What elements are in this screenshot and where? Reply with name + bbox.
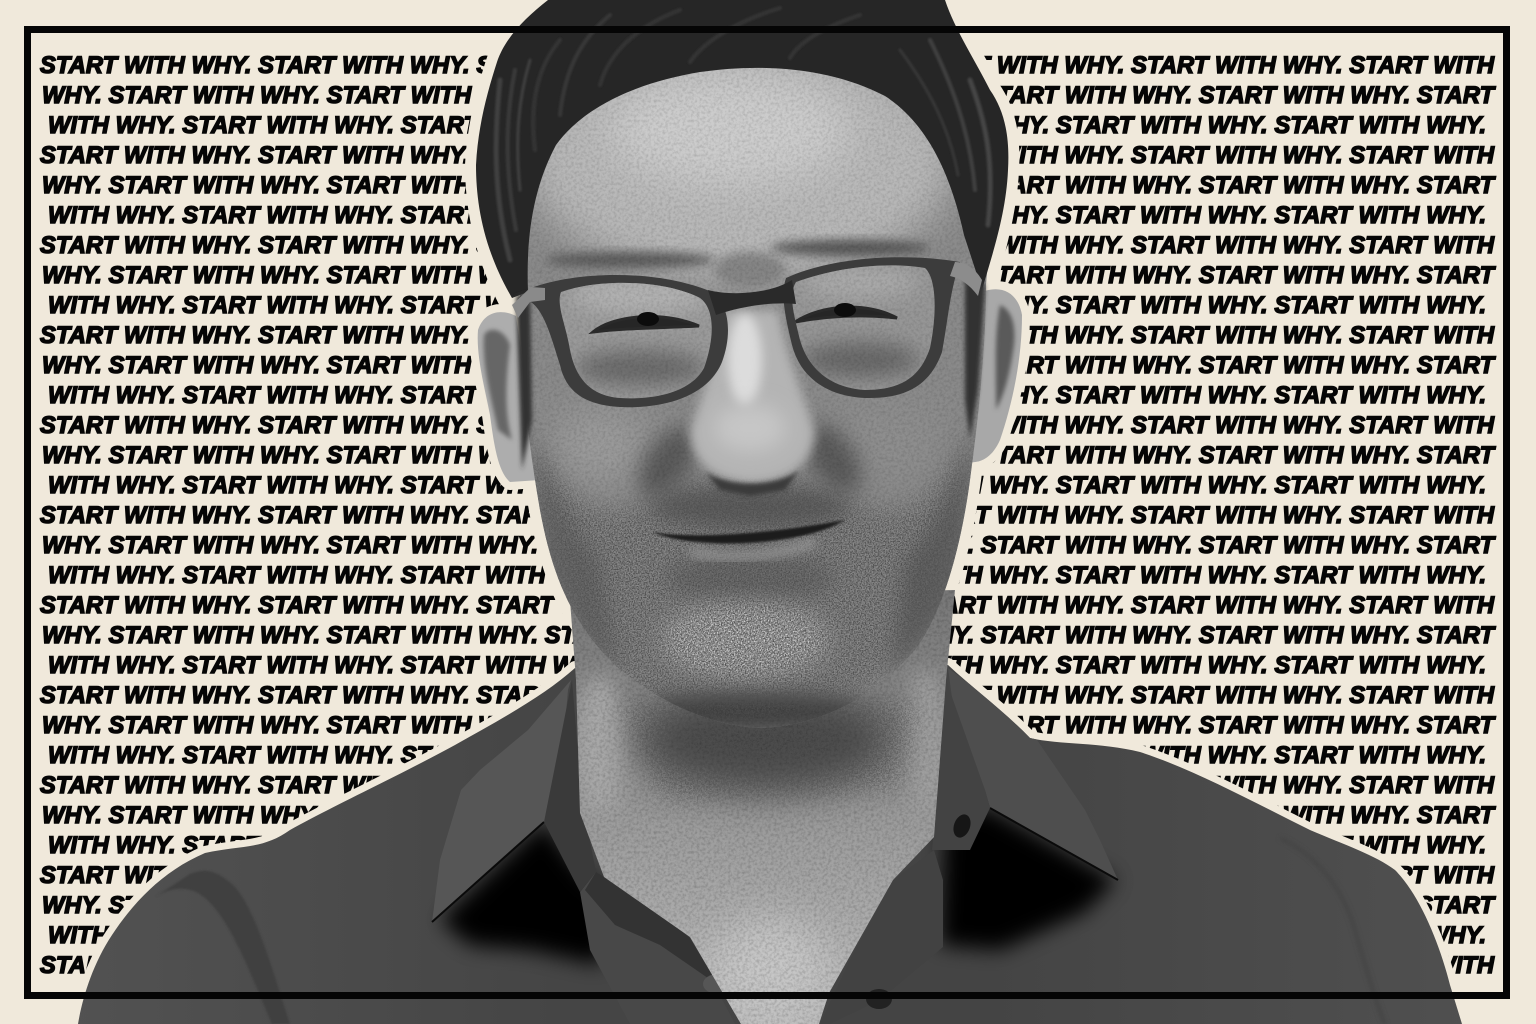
left collar bbox=[432, 680, 571, 922]
glasses bbox=[512, 250, 982, 410]
hair bbox=[476, 0, 1008, 298]
repeating text pattern: start with why: WHY. START WITH WHY. START WITH WHY. START WITH WHY. START WITH WHY. START WITH WHY. START WITH WHY. START bbox=[42, 443, 1497, 469]
repeating text pattern: start with why: WITH WHY. START WITH WHY. START WITH WHY. START WITH WHY. START WITH WHY. START WITH WHY. START WITH WHY. bbox=[48, 473, 1486, 499]
face bbox=[520, 68, 988, 728]
repeating text pattern: start with why: WHY. START WITH WHY. START WITH WHY. START WITH WHY. START WITH WHY. START WITH WHY. START WITH WHY. START bbox=[42, 623, 1497, 649]
sideburn right bbox=[965, 270, 985, 440]
hair strands bbox=[496, 8, 990, 260]
nose side shadows bbox=[630, 420, 700, 502]
repeating text pattern: start with why: WITH WHY. START WITH WHY. START WITH WHY. START WITH WHY. START WITH WHY. START WITH WHY. START WITH WHY. bbox=[48, 923, 1486, 949]
mouth bbox=[652, 520, 845, 544]
central brow crease bbox=[714, 252, 786, 288]
beard sides bbox=[531, 448, 622, 668]
nostril shadow bbox=[705, 470, 800, 496]
black shadow under left collar bbox=[440, 822, 620, 965]
skin grain bbox=[528, 68, 986, 724]
chin grey speckle bbox=[660, 602, 830, 678]
left eye bbox=[593, 317, 699, 332]
right lens bbox=[792, 265, 935, 390]
sleeve seam right bbox=[1280, 838, 1385, 1024]
right collar stand bbox=[933, 698, 990, 850]
neck stubble bbox=[620, 700, 920, 800]
left ear bbox=[478, 312, 540, 482]
shirt button lower right bbox=[866, 989, 892, 1009]
repeating text pattern: start with why: WHY. START WITH WHY. START WITH WHY. START WITH WHY. START WITH WHY. START WITH WHY. START WITH WHY. START bbox=[42, 803, 1497, 829]
temple left bbox=[512, 287, 545, 318]
right eye bbox=[795, 307, 897, 322]
repeating text pattern: start with why: START WITH WHY. START WITH WHY. START WITH WHY. START WITH WHY. START WITH WHY. START WITH WHY. START WITH bbox=[40, 323, 1495, 349]
repeating text pattern: start with why: START WITH WHY. START WITH WHY. START WITH WHY. START WITH WHY. START WITH WHY. START WITH WHY. START WITH bbox=[40, 53, 1495, 79]
black shadow under right collar bbox=[940, 806, 1116, 950]
temple right bbox=[950, 262, 982, 296]
repeating text pattern: start with why: START WITH WHY. START WITH WHY. START WITH WHY. START WITH WHY. START WITH WHY. START WITH WHY. START WITH bbox=[40, 503, 1495, 529]
right placket bbox=[931, 850, 943, 950]
repeating text pattern: start with why: WITH WHY. START WITH WHY. START WITH WHY. START WITH WHY. START WITH WHY. START WITH WHY. START WITH WHY. bbox=[48, 203, 1486, 229]
left collar stand bbox=[544, 680, 596, 892]
repeating text pattern: start with why: WHY. START WITH WHY. START WITH WHY. START WITH WHY. START WITH WHY. START WITH WHY. START WITH WHY. START bbox=[42, 533, 1497, 559]
left iris bbox=[637, 312, 659, 326]
sleeve seam left bbox=[155, 871, 290, 1024]
brow shadow bbox=[545, 252, 715, 268]
left frame outer bbox=[531, 275, 728, 407]
repeating text pattern: start with why: START WITH WHY. START WITH WHY. START WITH WHY. START WITH WHY. START WITH WHY. START WITH WHY. START WITH bbox=[40, 863, 1495, 889]
repeating text pattern: start with why: START WITH WHY. START WITH WHY. START WITH WHY. START WITH WHY. START WITH WHY. START WITH WHY. START WITH bbox=[40, 683, 1495, 709]
left lens bbox=[560, 282, 712, 398]
sideburn left bbox=[516, 292, 532, 470]
repeating text pattern: start with why: WITH WHY. START WITH WHY. START WITH WHY. START WITH WHY. START WITH WHY. START WITH WHY. START WITH WHY. bbox=[48, 743, 1486, 769]
right ear bbox=[965, 289, 1022, 462]
repeating text pattern: start with why: WITH WHY. START WITH WHY. START WITH WHY. START WITH WHY. START WITH WHY. START WITH WHY. START WITH WHY. bbox=[48, 293, 1486, 319]
repeating text pattern: start with why: START WITH WHY. START WITH WHY. START WITH WHY. START WITH WHY. START WITH WHY. START WITH WHY. START WITH bbox=[40, 233, 1495, 259]
right frame outer bbox=[784, 257, 960, 398]
right iris bbox=[834, 303, 856, 317]
bridge bbox=[708, 280, 796, 315]
repeating text pattern: start with why: WHY. START WITH WHY. START WITH WHY. START WITH WHY. START WITH WHY. START WITH WHY. START WITH WHY. START bbox=[42, 893, 1497, 919]
repeating text pattern: start with why: WHY. START WITH WHY. START WITH WHY. START WITH WHY. START WITH WHY. START WITH WHY. START WITH WHY. START bbox=[42, 353, 1497, 379]
beard texture bbox=[530, 420, 972, 720]
nose bbox=[690, 310, 815, 484]
repeating text pattern: start with why: WITH WHY. START WITH WHY. START WITH WHY. START WITH WHY. START WITH WHY. START WITH WHY. START WITH WHY. bbox=[48, 653, 1486, 679]
repeating text pattern: start with why: WITH WHY. START WITH WHY. START WITH WHY. START WITH WHY. START WITH WHY. START WITH WHY. START WITH WHY. bbox=[48, 833, 1486, 859]
lower lip bbox=[690, 542, 815, 556]
left placket bbox=[580, 874, 626, 974]
repeating text pattern: start with why: WHY. START WITH WHY. START WITH WHY. START WITH WHY. START WITH WHY. START WITH WHY. START WITH WHY. START bbox=[42, 83, 1497, 109]
repeating text pattern: start with why: WHY. START WITH WHY. START WITH WHY. START WITH WHY. START WITH WHY. START WITH WHY. START WITH WHY. START bbox=[42, 263, 1497, 289]
repeating text pattern: start with why: WITH WHY. START WITH WHY. START WITH WHY. START WITH WHY. START WITH WHY. START WITH WHY. START WITH WHY. bbox=[48, 563, 1486, 589]
upper lip stubble bbox=[650, 485, 850, 529]
right collar bbox=[948, 668, 1118, 880]
repeating text pattern: start with why: WITH WHY. START WITH WHY. START WITH WHY. START WITH WHY. START WITH WHY. START WITH WHY. START WITH WHY. bbox=[48, 113, 1486, 139]
collar button right bbox=[954, 814, 970, 838]
repeating text pattern: start with why: START WITH WHY. START WITH WHY. START WITH WHY. START WITH WHY. START WITH WHY. START WITH WHY. START WITH bbox=[40, 773, 1495, 799]
cheeks bbox=[556, 410, 642, 480]
neck and chest skin bbox=[560, 590, 960, 1024]
repeating text pattern: start with why: WHY. START WITH WHY. START WITH WHY. START WITH WHY. START WITH WHY. START WITH WHY. START WITH WHY. START bbox=[42, 173, 1497, 199]
shirt bbox=[60, 650, 1480, 1024]
repeating text pattern: start with why: START WITH WHY. START WITH WHY. START WITH WHY. START WITH WHY. START WITH WHY. START WITH WHY. START WITH bbox=[40, 953, 1495, 979]
forehead highlight bbox=[525, 40, 955, 280]
repeating text pattern: start with why: WITH WHY. START WITH WHY. START WITH WHY. START WITH WHY. START WITH WHY. START WITH WHY. START WITH WHY. bbox=[48, 383, 1486, 409]
repeating text pattern: start with why: START WITH WHY. START WITH WHY. START WITH WHY. START WITH WHY. START WITH WHY. START WITH WHY. START WITH bbox=[40, 143, 1495, 169]
repeating text pattern: start with why: WHY. START WITH WHY. START WITH WHY. START WITH WHY. START WITH WHY. START WITH WHY. START WITH WHY. START bbox=[42, 713, 1497, 739]
shirt button left bbox=[703, 975, 722, 992]
repeating text pattern: start with why: START WITH WHY. START WITH WHY. START WITH WHY. START WITH WHY. START WITH WHY. START WITH WHY. START WITH bbox=[40, 413, 1495, 439]
repeating text pattern: start with why: START WITH WHY. START WITH WHY. START WITH WHY. START WITH WHY. START WITH WHY. START WITH WHY. START WITH bbox=[40, 593, 1495, 619]
lower lip and chin bbox=[665, 552, 835, 604]
